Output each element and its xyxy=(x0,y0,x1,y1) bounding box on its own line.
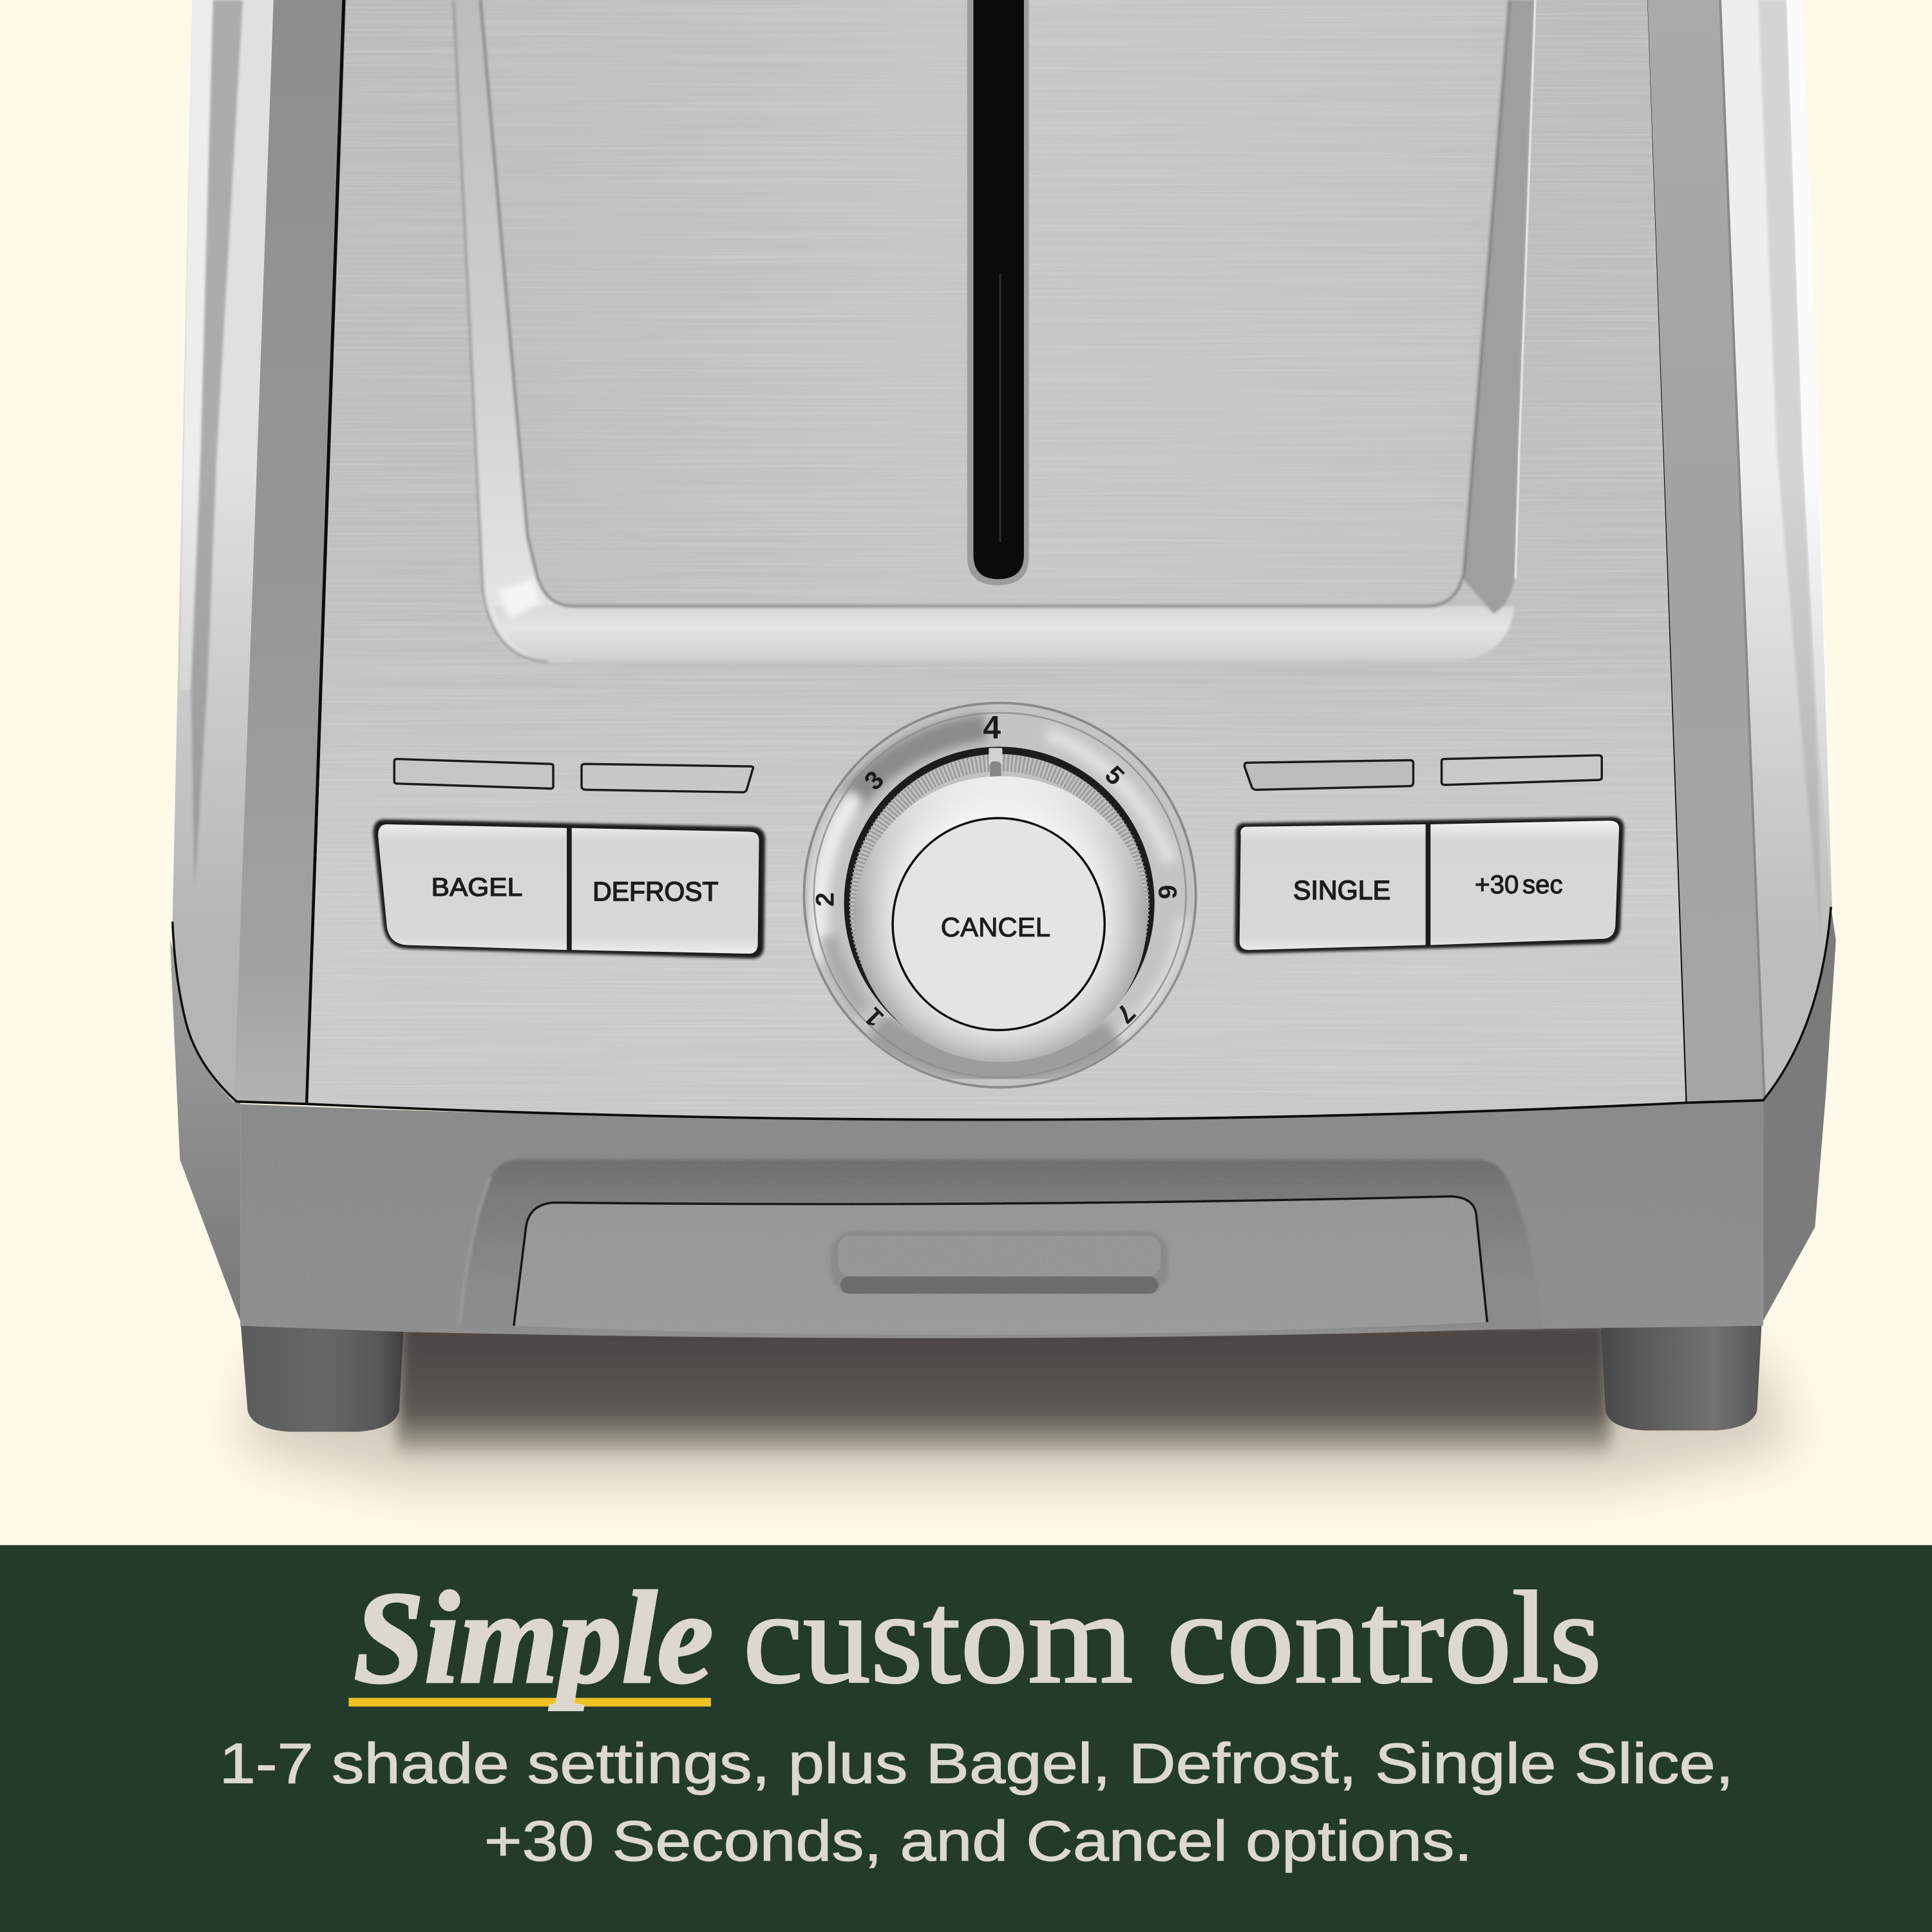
right dark band xyxy=(1647,0,1765,1103)
button: single xyxy=(1240,824,1426,950)
headline: Simple xyxy=(354,1566,714,1711)
panel bevel xyxy=(453,0,573,661)
cancel cap: CANCEL xyxy=(941,912,1050,942)
bread slot xyxy=(967,0,1029,585)
headline: custom controls xyxy=(743,1566,1602,1711)
left dark band xyxy=(234,0,346,1104)
dial outer ring xyxy=(802,702,1197,1088)
shade numbers: 1 xyxy=(858,1002,889,1032)
left button group xyxy=(374,819,765,959)
indicator lights xyxy=(394,755,1602,792)
button: +30 sec: +30 sec xyxy=(1475,870,1563,899)
right outer silver strip xyxy=(1720,0,1832,1101)
shade numbers: 7 xyxy=(1110,998,1141,1029)
headline xyxy=(354,1566,1602,1711)
left side of body xyxy=(170,0,346,1321)
cancel cap xyxy=(893,818,1104,1030)
button: defrost xyxy=(572,828,759,954)
shade numbers xyxy=(810,710,1182,1032)
shade numbers: 5 xyxy=(1099,760,1130,791)
left outer silver strip xyxy=(173,0,276,1103)
button: bagel: BAGEL xyxy=(431,873,522,902)
recessed slot panel xyxy=(453,0,1535,661)
accent underline xyxy=(348,1698,711,1707)
button: single: SINGLE xyxy=(1293,875,1390,905)
knurled dial collar xyxy=(844,746,1155,1059)
dial pointer xyxy=(989,748,1002,784)
button: bagel xyxy=(378,824,567,950)
description xyxy=(220,1731,1734,1873)
dial knob xyxy=(854,776,1147,1062)
brushed front panel xyxy=(296,0,1700,1140)
recess around crumb tray xyxy=(460,1159,1542,1328)
button: defrost: DEFROST xyxy=(592,876,718,907)
right side of body xyxy=(1646,0,1836,1321)
shade numbers: 4 xyxy=(983,710,1001,746)
toaster xyxy=(170,0,1836,1432)
grey plastic base xyxy=(234,1097,1768,1349)
tray handle xyxy=(831,1231,1168,1294)
shade numbers: 6 xyxy=(1153,885,1182,899)
shadow under toaster xyxy=(240,1318,1793,1484)
flat panel surface xyxy=(480,0,1510,606)
right button group xyxy=(1235,817,1624,954)
green caption band xyxy=(0,1545,1932,1932)
button: +30 sec xyxy=(1430,820,1619,945)
shade dial xyxy=(802,702,1197,1088)
shade numbers: 3 xyxy=(858,765,889,796)
crumb tray xyxy=(514,1197,1487,1335)
shade numbers: 2 xyxy=(810,893,839,907)
description: +30 Seconds, and Cancel options. xyxy=(484,1809,1472,1873)
description: 1-7 shade settings, plus Bagel, Defrost, Single Slice, xyxy=(220,1731,1734,1795)
feet xyxy=(240,1318,1762,1432)
